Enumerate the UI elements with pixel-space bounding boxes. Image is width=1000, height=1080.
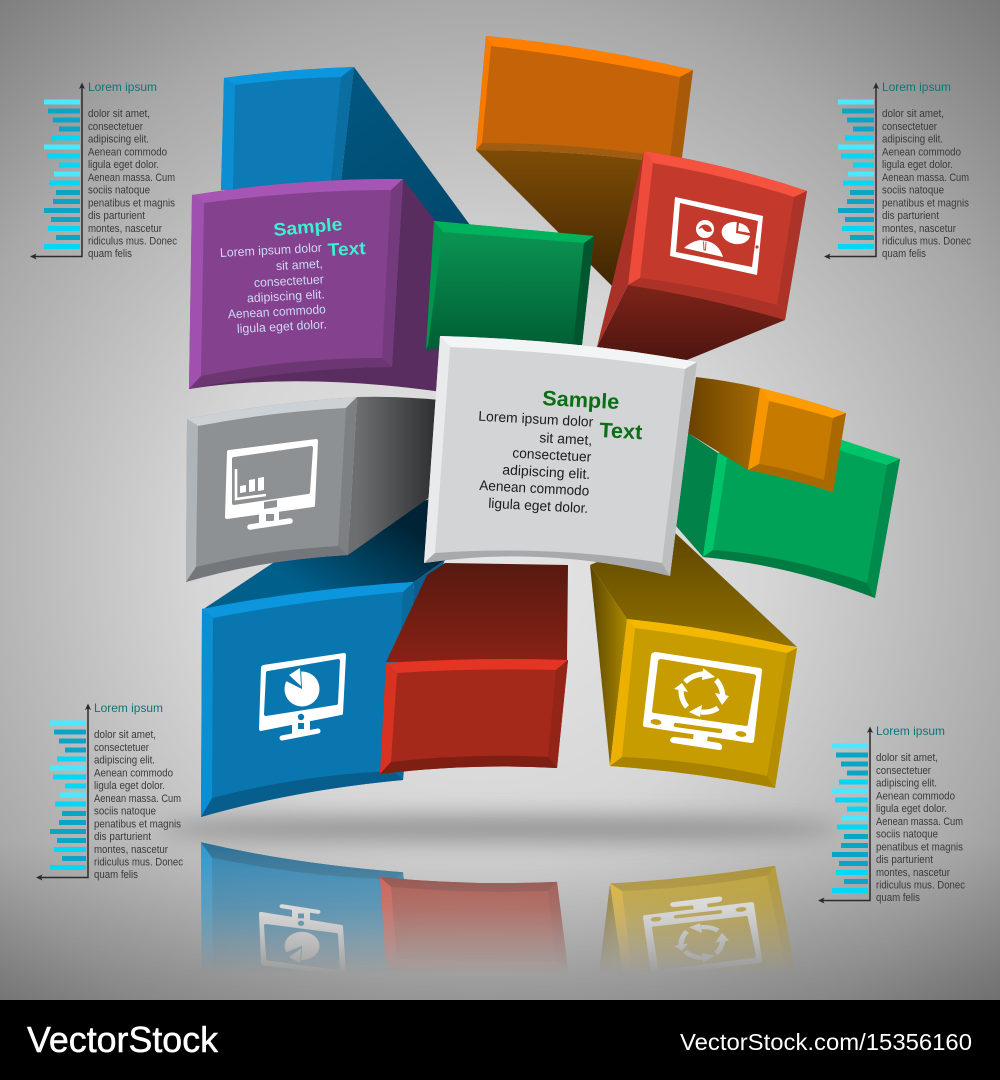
text: montes, nascetur <box>882 223 956 235</box>
text: adipiscing elit. <box>94 754 155 766</box>
purple heading: Text <box>327 238 366 260</box>
white panel heading <box>542 387 643 444</box>
reflection of the lower blocks <box>201 842 794 968</box>
text: adipiscing elit. <box>88 134 149 146</box>
text: ridiculus mus. Donec <box>882 236 972 248</box>
block: lower red <box>380 563 568 774</box>
text <box>882 80 972 260</box>
text: montes, nascetur <box>88 223 162 235</box>
purple heading <box>273 214 366 260</box>
axis arrows <box>36 704 91 880</box>
text <box>94 701 184 881</box>
text: sociis natoque <box>88 184 150 196</box>
side panel: top right <box>824 80 972 260</box>
block: gray with bar chart monitor icon <box>186 397 440 582</box>
text: Aenean commodo <box>94 767 173 779</box>
text: ligula eget dolor. <box>876 803 947 815</box>
bars <box>44 100 80 249</box>
text: sociis natoque <box>876 828 938 840</box>
white panel body text: Aenean commodo <box>479 477 590 499</box>
white panel body text: adipiscing elit. <box>502 461 591 482</box>
text: dolor sit amet, <box>88 108 150 120</box>
white panel body text <box>478 408 594 516</box>
text: dis parturient <box>882 210 939 222</box>
text: Aenean massa. Cum <box>94 793 181 805</box>
text: sociis natoque <box>882 184 944 196</box>
white panel body text: sit amet, <box>539 429 593 448</box>
icon: monitor with cycle arrows <box>643 652 762 750</box>
axis arrows <box>30 82 85 260</box>
purple body text: ligula eget dolor. <box>237 317 327 336</box>
text: Lorem ipsum <box>876 724 945 738</box>
text: penatibus et magnis <box>882 197 970 209</box>
text: penatibus et magnis <box>876 841 964 853</box>
text: quam felis <box>88 248 133 260</box>
text: montes, nascetur <box>94 844 168 856</box>
purple body text: sit amet, <box>275 257 323 273</box>
side panel: top left <box>30 80 178 260</box>
bars <box>50 720 86 870</box>
watermark bar: VectorStock.com/15356160 <box>680 1029 972 1055</box>
purple body text <box>220 241 327 336</box>
text: dolor sit amet, <box>882 108 944 120</box>
text: Aenean commodo <box>88 146 167 158</box>
block: orange top <box>476 36 693 292</box>
text: penatibus et magnis <box>94 818 182 830</box>
text: dolor sit amet, <box>876 752 938 764</box>
axis arrows <box>818 726 873 904</box>
text: montes, nascetur <box>876 867 950 879</box>
block: small green <box>426 221 594 349</box>
bars <box>838 100 874 249</box>
text: ligula eget dolor. <box>94 780 165 792</box>
white panel body text: consectetuer <box>512 445 592 465</box>
white panel heading: Text <box>599 419 643 444</box>
text: Aenean massa. Cum <box>882 172 969 184</box>
text: quam felis <box>94 869 139 881</box>
icon: monitor with pie chart <box>259 653 346 738</box>
block: yellow with cycle monitor icon <box>590 530 797 788</box>
block: blue top <box>221 67 470 300</box>
watermark bar: VectorStock <box>27 1019 219 1060</box>
purple body text: consectetuer <box>254 272 324 290</box>
purple body text: Aenean commodo <box>228 302 326 321</box>
block: purple with text <box>189 179 442 392</box>
watermark bar <box>0 1000 1000 1080</box>
block: red with tablet icon <box>597 151 807 360</box>
bars <box>832 744 868 893</box>
block: green right <box>676 433 900 598</box>
white panel body text: Lorem ipsum dolor <box>478 408 594 430</box>
text: Aenean massa. Cum <box>88 172 175 184</box>
text: quam felis <box>882 248 927 260</box>
white panel heading: Sample <box>542 387 620 414</box>
text: dis parturient <box>94 831 151 843</box>
text: ridiculus mus. Donec <box>876 880 966 892</box>
text <box>88 80 178 260</box>
text: quam felis <box>876 892 921 904</box>
text: penatibus et magnis <box>88 197 176 209</box>
side panel: bottom left <box>36 701 184 881</box>
text: Lorem ipsum <box>882 80 951 94</box>
text: adipiscing elit. <box>876 778 937 790</box>
axis arrows <box>824 82 879 260</box>
text: consectetuer <box>876 765 931 777</box>
text: dolor sit amet, <box>94 729 156 741</box>
text: sociis natoque <box>94 806 156 818</box>
text: consectetuer <box>88 121 143 133</box>
text: Lorem ipsum <box>88 80 157 94</box>
purple heading: Sample <box>273 214 343 240</box>
block: orange right small <box>688 377 846 492</box>
text: ligula eget dolor. <box>882 159 953 171</box>
text <box>876 724 966 904</box>
side panel: bottom right <box>818 724 966 904</box>
text: ligula eget dolor. <box>88 159 159 171</box>
text: Aenean commodo <box>882 146 961 158</box>
purple body text: adipiscing elit. <box>247 287 325 305</box>
icon: tablet with person and pie chart <box>670 197 763 275</box>
text: Aenean massa. Cum <box>876 816 963 828</box>
text: consectetuer <box>94 742 149 754</box>
white panel body text: ligula eget dolor. <box>488 495 589 516</box>
text: ridiculus mus. Donec <box>88 236 178 248</box>
icon: monitor with bars <box>225 439 318 527</box>
text: adipiscing elit. <box>882 134 943 146</box>
block: center white with text <box>424 336 697 576</box>
block: lower blue with pie monitor icon <box>201 498 445 817</box>
text: Aenean commodo <box>876 790 955 802</box>
text: dis parturient <box>88 210 145 222</box>
purple body text: Lorem ipsum dolor <box>220 241 322 260</box>
text: ridiculus mus. Donec <box>94 856 184 868</box>
text: Lorem ipsum <box>94 701 163 715</box>
text: consectetuer <box>882 121 937 133</box>
text: dis parturient <box>876 854 933 866</box>
